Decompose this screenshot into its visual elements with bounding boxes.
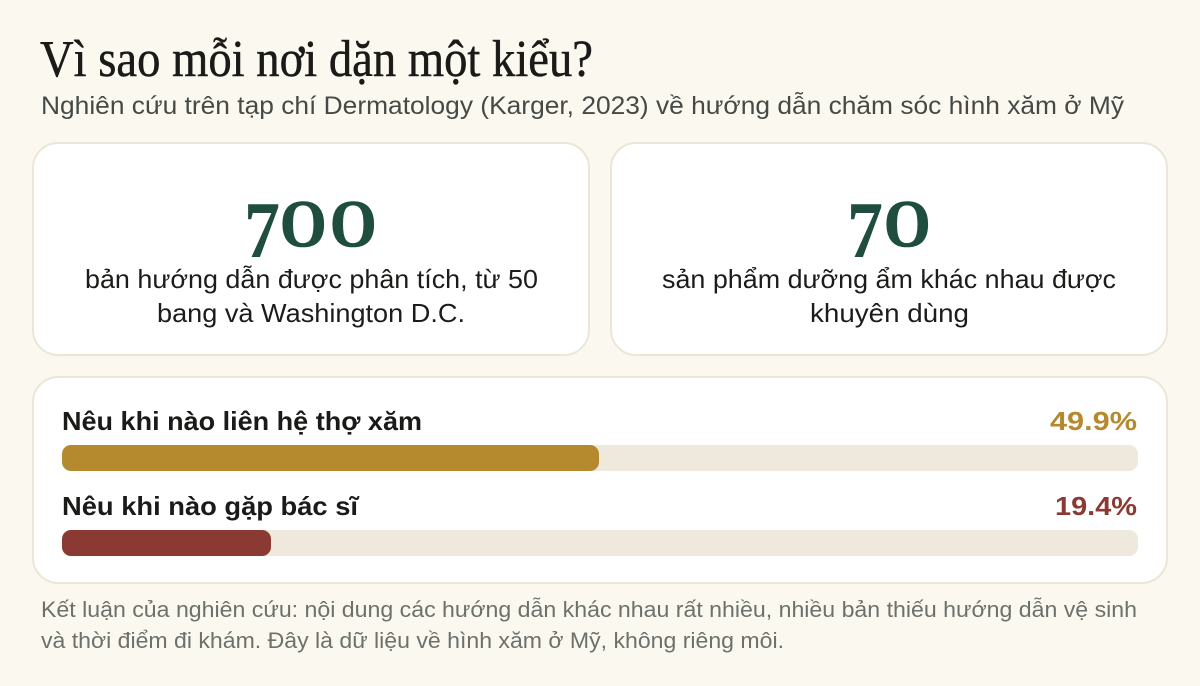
panel: bar chart bbox=[33, 377, 1167, 583]
bar row: contact the tattoo artist bbox=[62, 406, 1138, 471]
conclusion note: Kết luận của nghiên cứu: nội dung các hướng dẫn khác nhau rất nhiều, nhiều bản thiếu hướng dẫn vệ sinh bbox=[41, 597, 1137, 622]
bar row: contact the tattoo artist: 49.9% bbox=[1050, 406, 1137, 436]
stat description: products: sản phẩm dưỡng ẩm khác nhau được bbox=[662, 264, 1116, 294]
stat number: 700: 0 bbox=[280, 188, 326, 261]
conclusion note: và thời điểm đi khám. Đây là dữ liệu về hình xăm ở Mỹ, không riêng môi. bbox=[41, 628, 784, 653]
stat number: 700: 0 bbox=[330, 188, 376, 261]
stat description: guides: bang và Washington D.C. bbox=[157, 298, 465, 328]
subtitle: Nghiên cứu trên tạp chí Dermatology (Karger, 2023) về hướng dẫn chăm sóc hình xăm ở Mỹ bbox=[41, 91, 1125, 120]
bar row: see a doctor: 19.4% bbox=[1055, 491, 1137, 521]
title: Vì sao mỗi nơi dặn một kiểu? bbox=[40, 31, 593, 88]
panel: 700 guides bbox=[33, 143, 589, 355]
stat number: 70: 0 bbox=[884, 188, 930, 261]
bar row: contact the tattoo artist: Nêu khi nào liên hệ thợ xăm bbox=[62, 406, 422, 436]
stat description: products: khuyên dùng bbox=[810, 298, 969, 328]
stat description: guides: bản hướng dẫn được phân tích, từ 50 bbox=[85, 264, 538, 294]
panel: 70 products bbox=[611, 143, 1167, 355]
stat number: 70: 7 bbox=[847, 185, 883, 275]
bar row: see a doctor bbox=[62, 491, 1138, 556]
bar row: see a doctor: Nêu khi nào gặp bác sĩ bbox=[62, 491, 360, 521]
stat number: 700: 7 bbox=[244, 185, 280, 275]
